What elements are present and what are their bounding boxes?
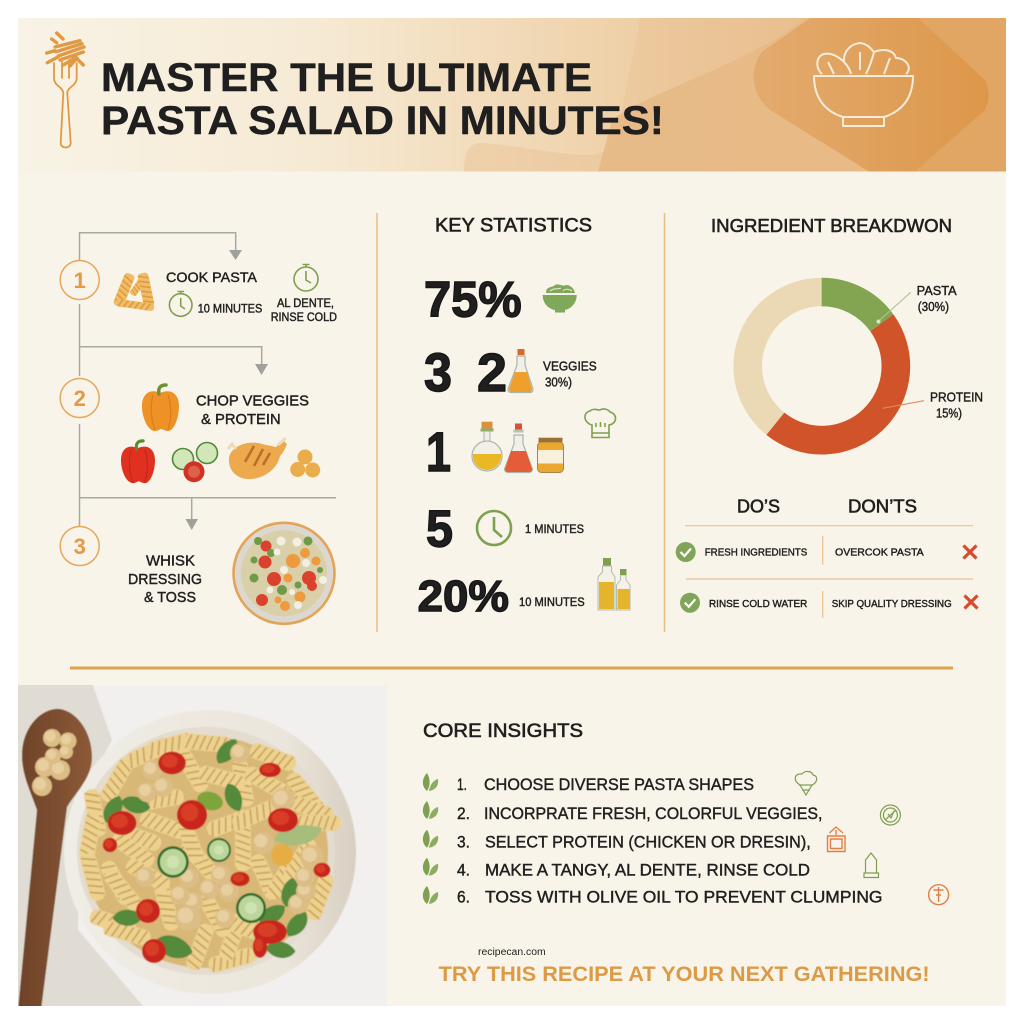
icon: orange pepper — [142, 385, 179, 431]
insight 3: 3. — [457, 832, 470, 851]
call to action: TRY THIS RECIPE AT YOUR NEXT GATHERING! — [439, 963, 930, 986]
step 1 number: 1 — [74, 268, 86, 293]
stat: 75%: 75% — [424, 272, 522, 328]
stat: 5: 5 — [426, 501, 453, 559]
step 1 tip — [271, 298, 337, 324]
flow connector lines — [80, 233, 336, 526]
insight 5: TOSS WITH OLIVE OIL TO PREVENT CLUMPING — [485, 888, 882, 907]
icon: check — [676, 542, 696, 562]
step 3 number — [60, 526, 99, 566]
vertical column dividers — [377, 213, 664, 632]
icon: red vinegar flask — [504, 424, 532, 472]
icon: vinegar flask — [508, 349, 533, 392]
callout: protein: 15%) — [936, 407, 962, 421]
icon: olive oil bottles — [598, 558, 630, 610]
step 3 number: 3 — [74, 534, 86, 559]
panel: ingredient breakdown — [676, 215, 983, 618]
don't item: SKIP QUALITY DRESSING — [832, 598, 952, 610]
stat: 20%: 20% — [418, 572, 509, 621]
insight 5: 6. — [457, 888, 470, 907]
stat: 2: 2 — [477, 343, 507, 403]
insight 1: CHOOSE DIVERSE PASTA SHAPES — [484, 775, 754, 794]
stat caption: 10 minutes: 10 MINUTES — [519, 597, 585, 609]
icon: green salad bowl — [543, 284, 577, 312]
icon: roast chicken — [228, 438, 287, 479]
stat caption: veggies — [543, 359, 597, 390]
step 2 label: CHOP VEGGIES — [196, 394, 309, 410]
step 2 number: 2 — [74, 386, 86, 411]
step 3 label: DRESSING — [128, 572, 202, 588]
title: PASTA SALAD IN MINUTES! — [101, 99, 664, 143]
heading: KEY STATISTICS — [435, 216, 592, 237]
icon: chef hat — [585, 409, 616, 438]
step 2 label: & PROTEIN — [201, 412, 281, 428]
panel: header banner — [18, 18, 1006, 172]
icon: timer — [294, 264, 318, 291]
panel: core insights — [423, 721, 949, 986]
step 2 label — [196, 394, 309, 428]
stat caption: 1 minutes: 1 MINUTES — [525, 524, 584, 536]
do item: FRESH INGREDIENTS — [705, 546, 807, 558]
bowl — [64, 710, 356, 994]
donut chart — [748, 292, 896, 440]
icon: olive oil badge — [929, 885, 949, 905]
insight 4: 4. — [457, 860, 470, 879]
step 1 tip: RINSE COLD — [271, 312, 337, 324]
don't item: OVERCOK PASTA — [835, 546, 924, 558]
icon: salad plate — [234, 523, 334, 624]
tomatoes — [158, 752, 186, 774]
icon: cross — [964, 546, 976, 558]
icon: check — [680, 593, 700, 613]
icon: fusilli pasta — [113, 272, 155, 311]
icon: fork with pasta — [47, 33, 84, 148]
panel: recipe steps — [60, 233, 337, 624]
step 1 duration: 10 MINUTES — [198, 302, 262, 316]
source credit: recipecan.com — [478, 947, 546, 958]
icon: veggie badge — [880, 805, 900, 825]
stat: 3: 3 — [424, 343, 452, 403]
icon: dressing bottle — [864, 853, 878, 878]
heading: INGREDIENT BREAKDWON — [711, 215, 952, 236]
photo: pasta salad bowl — [18, 685, 357, 1006]
step 3 label: & TOSS — [144, 590, 196, 606]
callout: protein: PROTEIN — [930, 390, 983, 404]
icon: red pepper — [121, 441, 155, 483]
step 3 label: WHISK — [146, 554, 195, 570]
cucumbers — [157, 846, 189, 878]
step 1 label: COOK PASTA — [166, 269, 258, 285]
step 2 number — [60, 378, 99, 418]
icon: oil bottle — [472, 422, 502, 471]
stat: 1: 1 — [426, 420, 451, 483]
icon: pasta dome — [795, 771, 817, 795]
icon: chickpeas — [290, 450, 320, 478]
icon: mustard jar — [538, 438, 564, 472]
insight 2 — [423, 801, 822, 823]
callout: pasta: (30%) — [918, 300, 949, 314]
don'ts heading: DON’TS — [848, 496, 917, 516]
icon: cross — [964, 596, 978, 608]
insight 3: SELECT PROTEIN (CHICKEN OR DRESIN), — [485, 832, 811, 851]
icon: cucumber and tomato — [172, 442, 218, 482]
step 3 label — [128, 554, 202, 606]
icon: timer — [169, 292, 192, 316]
heading: CORE INSIGHTS — [423, 721, 583, 742]
insight 2: INCORPRATE FRESH, COLORFUL VEGGIES, — [484, 804, 822, 823]
insight 2: 2. — [457, 804, 470, 823]
do's heading: DO’S — [737, 496, 780, 516]
step 1 tip: AL DENTE, — [277, 298, 334, 310]
table rules — [685, 526, 973, 618]
callout: pasta: PASTA — [917, 284, 957, 298]
icon: protein box — [828, 827, 845, 852]
wooden spoon — [18, 709, 92, 1010]
step 1 number — [60, 260, 99, 300]
icon: salad bowl — [814, 43, 913, 126]
panel: key statistics — [418, 216, 630, 621]
flow arrowheads — [186, 250, 268, 530]
horizontal section divider — [70, 666, 953, 670]
chickpeas — [142, 760, 162, 780]
stat caption: veggies: VEGGIES — [543, 359, 597, 373]
callout: protein — [883, 390, 983, 421]
title: MASTER THE ULTIMATE — [101, 56, 592, 100]
greens — [216, 738, 238, 764]
callout: pasta — [876, 284, 957, 324]
title — [101, 56, 664, 143]
insight 1: 1. — [457, 775, 467, 794]
do item: RINSE COLD WATER — [709, 598, 808, 610]
insight 4: MAKE A TANGY, AL DENTE, RINSE COLD — [485, 860, 810, 879]
pasta — [78, 731, 341, 974]
icon: clock — [477, 511, 511, 545]
stat caption: veggies: 30%) — [545, 376, 572, 390]
